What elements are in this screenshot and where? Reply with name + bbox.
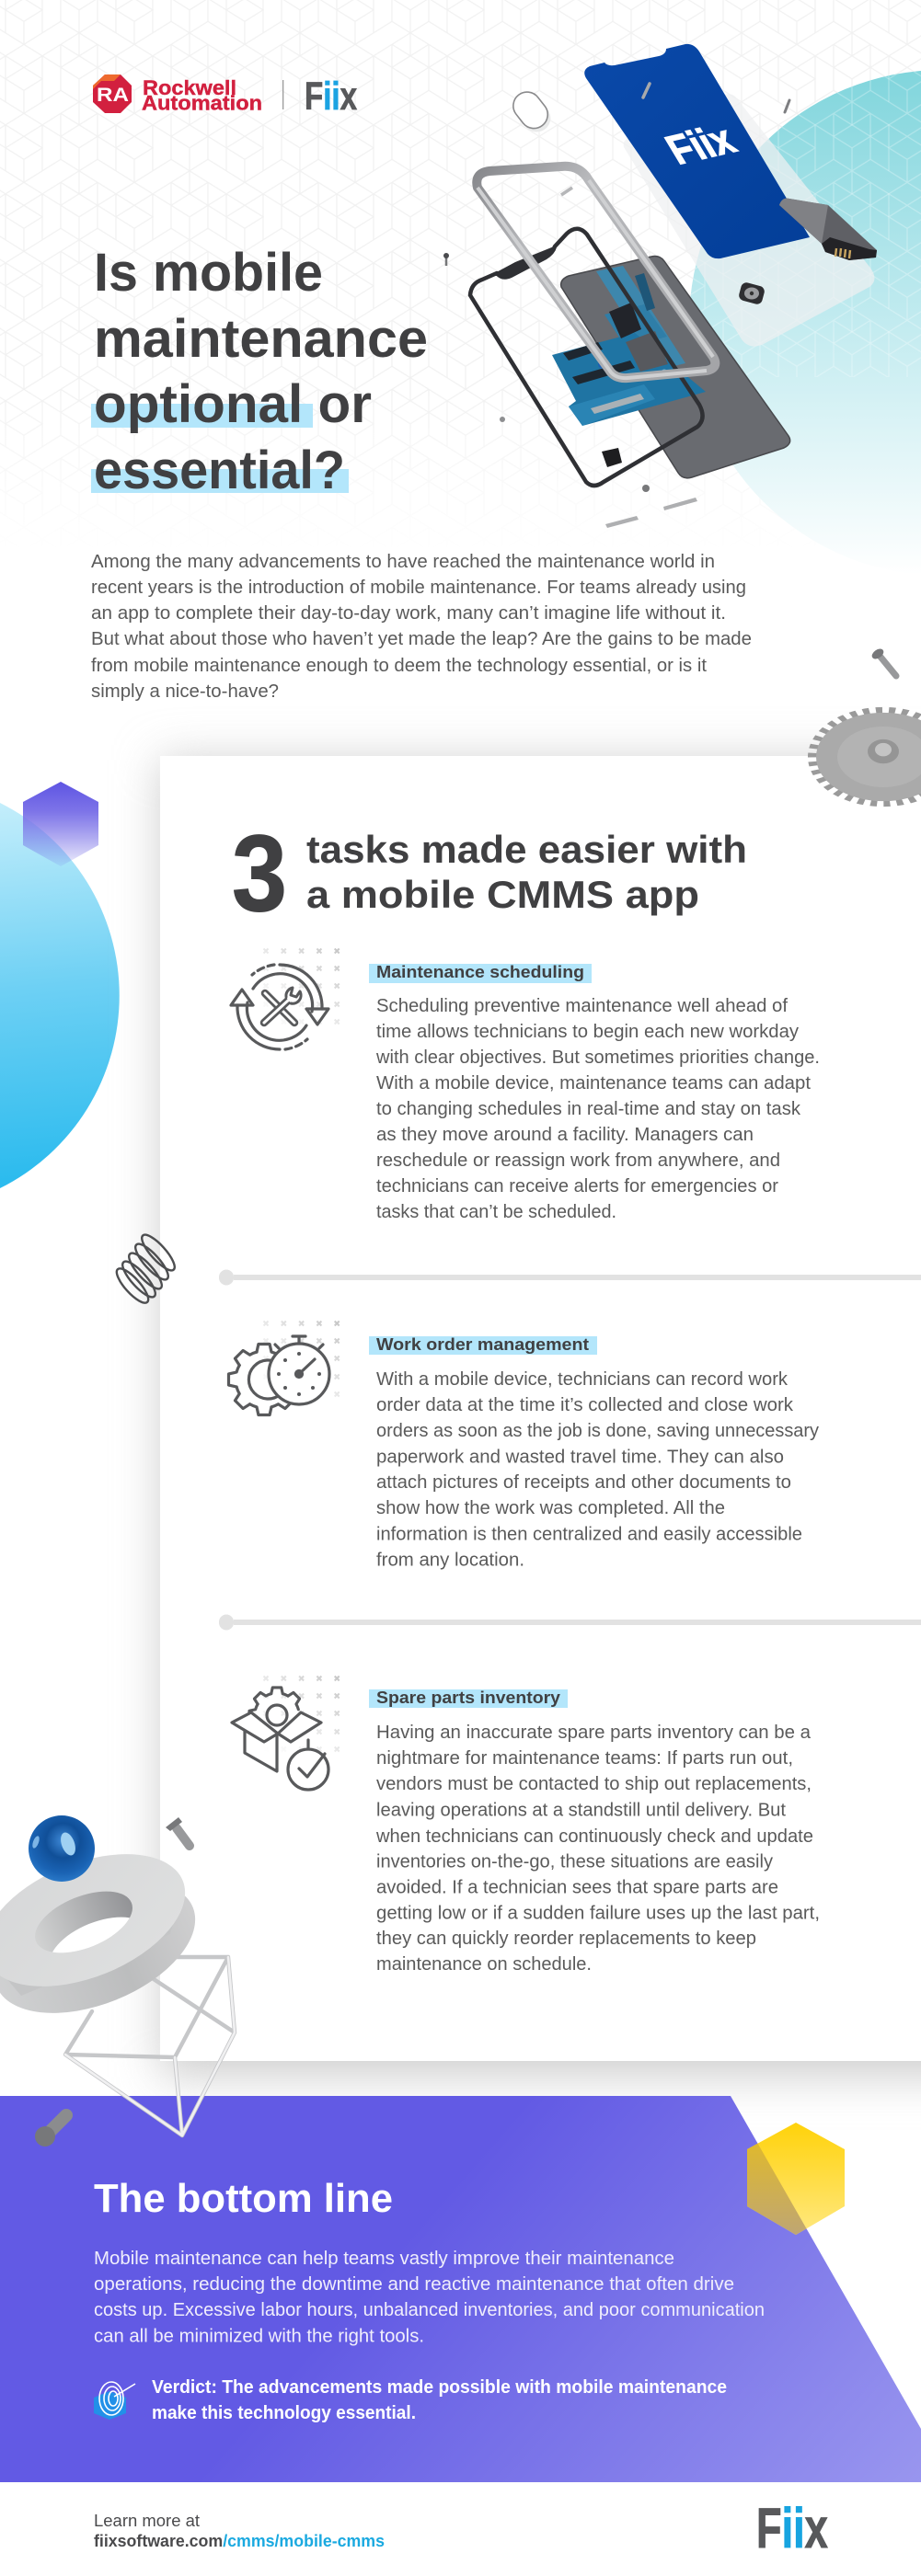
- left cyan circle: [0, 803, 120, 1188]
- section: spare parts inventory: [232, 1676, 820, 1975]
- title: Is mobile: [94, 243, 323, 303]
- intro paragraph: recent years is the introduction of mobile maintenance. For teams already using: [91, 578, 746, 598]
- heading: 3 tasks: [232, 813, 747, 934]
- body text: Mobile maintenance can help teams vastly improve their maintenance: [94, 2249, 674, 2269]
- card shadow: [160, 760, 921, 2077]
- icon: box with gear and check: [232, 1676, 340, 1790]
- screw on screen: [643, 84, 650, 97]
- blue ball: [29, 1815, 95, 1882]
- body text: Scheduling preventive maintenance well ahead of: [376, 996, 788, 1016]
- logo lockup: [93, 74, 358, 119]
- blue phone screen: Fiix: [658, 117, 744, 173]
- body text: time allows technicians to begin each new workday: [376, 1022, 799, 1042]
- intro paragraph: an app to complete their day-to-day work, many can’t imagine life without it.: [91, 603, 726, 624]
- heading: The bottom line: [94, 2176, 393, 2221]
- battery: [779, 199, 877, 260]
- wordmark: Rockwell Automation: Automation: [142, 92, 262, 114]
- intro paragraph: [91, 552, 752, 702]
- body text: order data at the time it’s collected and close work: [376, 1395, 794, 1415]
- body text: inventories on-the-go, these situations are easily: [376, 1852, 773, 1872]
- body text: as they move around a facility. Managers can: [376, 1125, 754, 1145]
- body text: avoided. If a technician sees that spare parts are: [376, 1878, 778, 1898]
- body text: leaving operations at a standstill until delivery. But: [376, 1801, 786, 1821]
- title: [91, 243, 428, 500]
- body text: maintenance on schedule.: [376, 1954, 592, 1975]
- title: optional or: [94, 374, 372, 434]
- stopwatch: [269, 1336, 329, 1404]
- body text: With a mobile device, maintenance teams can adapt: [376, 1073, 811, 1093]
- small bolt: [166, 1817, 190, 1846]
- purple hexagon: [23, 782, 98, 866]
- gear: [813, 711, 921, 803]
- wire cube: [65, 1957, 235, 2135]
- intro paragraph: from mobile maintenance enough to deem the technology essential, or is it: [91, 656, 707, 676]
- phone exploded illustration: [443, 44, 877, 528]
- body text: costs up. Excessive labor hours, unbalanced inventories, and poor communication: [94, 2300, 765, 2320]
- screws and small parts: [443, 100, 789, 528]
- heading: 3 tasks: 3: [232, 813, 287, 934]
- icon: Rockwell Automation octagon: [93, 74, 132, 113]
- learn more link: fiixsoftware.com/cmms/mobile-cmms: [94, 2532, 385, 2550]
- camera lens: [738, 281, 766, 305]
- icon: target: [94, 2382, 135, 2420]
- open box: [232, 1712, 321, 1742]
- body text: [375, 996, 820, 1222]
- subheading: Spare parts inventory: [376, 1688, 561, 1707]
- Fiix logo: Fiix: [756, 2497, 828, 2560]
- body text: to changing schedules in real-time and stay on task: [376, 1099, 801, 1119]
- body text: they can quickly reorder replacements to keep: [376, 1929, 756, 1949]
- white content card: [160, 756, 921, 2061]
- verdict: make this technology essential.: [152, 2403, 416, 2423]
- body text: reschedule or reassign work from anywhere, and: [376, 1151, 780, 1171]
- section: work order management: [228, 1321, 819, 1571]
- body text: vendors must be contacted to ship out replacements,: [376, 1774, 812, 1794]
- body text: can all be minimized with the right tools.: [94, 2327, 424, 2347]
- phone back plate: [624, 94, 874, 347]
- wordmark: Rockwell Automation: [142, 76, 262, 114]
- gear in box: [249, 1688, 305, 1721]
- body text: [375, 1723, 820, 1975]
- verdict: Verdict: The advancements made possible with mobile maintenance: [152, 2377, 727, 2398]
- body text: show how the work was completed. All the: [376, 1498, 725, 1518]
- wordmark: Fiix: Fiix: [305, 74, 358, 119]
- screw near gear: [870, 647, 896, 676]
- subheading: Maintenance scheduling: [376, 962, 584, 981]
- body text: orders as soon as the job is done, saving unnecessary: [376, 1421, 819, 1441]
- body text: tasks that can’t be scheduled.: [376, 1202, 616, 1222]
- learn more link: [94, 2512, 385, 2550]
- footer: [94, 2497, 828, 2560]
- body text: [94, 2249, 765, 2347]
- intro paragraph: But what about those who haven’t yet made the leap? Are the gains to be made: [91, 629, 752, 649]
- hexagon background pattern: [0, 0, 921, 552]
- body text: information is then centralized and easily accessible: [376, 1525, 802, 1545]
- wordmark: Rockwell Automation: Rockwell: [143, 76, 236, 99]
- body text: from any location.: [376, 1551, 524, 1571]
- section: maintenance scheduling: [231, 949, 820, 1222]
- bolt on panel: [35, 2115, 66, 2147]
- heading: 3 tasks: a mobile CMMS app: [306, 873, 699, 916]
- silver phone frame: [477, 166, 715, 378]
- heading: 3 tasks: tasks made easier with: [306, 828, 747, 871]
- body text: when technicians can continuously check and update: [375, 1826, 813, 1847]
- body text: with clear objectives. But sometimes priorities change.: [375, 1048, 820, 1068]
- black phone frame: [470, 229, 703, 486]
- title: maintenance: [94, 309, 428, 369]
- body text: paperwork and wasted travel time. They can also: [376, 1448, 784, 1468]
- yellow hexagon: [747, 2123, 845, 2235]
- intro paragraph: simply a nice-to-have?: [91, 681, 279, 702]
- body text: Having an inaccurate spare parts inventory can be a: [376, 1723, 812, 1743]
- icon: cycle with tools: [231, 949, 340, 1049]
- body text: nightmare for maintenance teams: If parts run out,: [376, 1748, 793, 1769]
- body text: operations, reducing the downtime and reactive maintenance that often drive: [94, 2274, 734, 2295]
- bottom line panel: [0, 2096, 921, 2482]
- gray phone back: [561, 257, 790, 478]
- subheading: Work order management: [376, 1334, 589, 1354]
- concrete ring: [0, 1854, 195, 2013]
- teal circle backdrop: [690, 71, 921, 541]
- intro paragraph: Among the many advancements to have reached the maintenance world in: [91, 552, 715, 572]
- body text: attach pictures of receipts and other documents to: [376, 1472, 791, 1493]
- check badge: [288, 1749, 328, 1790]
- verdict: [152, 2377, 727, 2423]
- gear outline: [228, 1345, 300, 1414]
- icon: gear and stopwatch: [228, 1321, 340, 1414]
- body text: [376, 1369, 819, 1571]
- icon: Rockwell Automation octagon: RA: [97, 85, 129, 106]
- body text: With a mobile device, technicians can record work: [376, 1369, 789, 1390]
- circuit boards: [552, 266, 706, 426]
- body text: technicians can receive alerts for emergencies or: [376, 1176, 778, 1196]
- title: essential?: [94, 441, 345, 500]
- pill ring: [508, 86, 556, 138]
- body text: getting low or if a sudden failure uses up the last part,: [376, 1904, 820, 1924]
- learn more link: Learn more at: [94, 2512, 200, 2530]
- blue phone screen: [584, 44, 810, 258]
- spring: [112, 1231, 179, 1307]
